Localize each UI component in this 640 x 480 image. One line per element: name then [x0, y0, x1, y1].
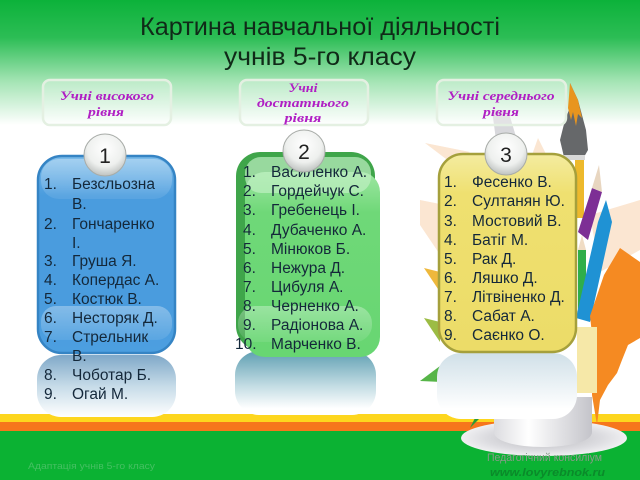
list: level 3 students — [444, 174, 565, 344]
list: level 2 students: 9. — [243, 317, 256, 334]
footer: left caption: Адаптація учнів 5-го класу — [28, 461, 155, 472]
list: level 2 students: Гордейчук С. — [271, 183, 364, 200]
label box: Учні достатнього рівня: достатнього — [257, 95, 350, 110]
icon: orange maple leaf — [590, 248, 640, 425]
title — [140, 13, 500, 71]
list: level 3 students: 8. — [444, 308, 457, 325]
list: level 2 students: 6. — [243, 260, 256, 277]
list: level 1 students: Чоботар Б. — [72, 367, 151, 384]
decoration: pale leaves behind the third panel — [420, 138, 640, 272]
list: level 1 students: Огай М. — [72, 386, 128, 403]
list: level 3 students: Батіг М. — [472, 232, 528, 249]
list: level 3 students: Літвіненко Д. — [472, 289, 565, 306]
footer: right credit — [487, 452, 605, 479]
badge: number 1: 1 — [99, 145, 111, 168]
decoration: ruler — [492, 110, 517, 140]
badge: number 3 — [485, 133, 527, 175]
list: level 2 students: Черненко А. — [271, 298, 359, 315]
list: level 3 students: 2. — [444, 193, 457, 210]
list: level 2 students: 5. — [243, 241, 256, 258]
list: level 3 students: Саєнко О. — [472, 327, 545, 344]
list: level 2 students: Цибуля А. — [271, 279, 343, 296]
list: level 3 students: 7. — [444, 289, 457, 306]
list: level 2 students: 4. — [243, 222, 256, 239]
list: level 3 students: Ляшко Д. — [472, 270, 538, 287]
list: level 1 students: В. — [72, 196, 87, 213]
list: level 1 students: 4. — [44, 272, 57, 289]
list: level 3 students: Султанян Ю. — [472, 193, 565, 210]
badge: number 3: 3 — [500, 144, 512, 167]
list: level 1 students: Копердас А. — [72, 272, 159, 289]
icon: white cup on a saucer — [461, 327, 627, 456]
list: level 1 students: Безсльозна — [72, 176, 155, 193]
label box: Учні достатнього рівня: Учні — [288, 80, 318, 95]
list: level 2 students: Мінюков Б. — [271, 241, 350, 258]
list: level 3 students: 1. — [444, 174, 457, 191]
list: level 1 students — [44, 176, 159, 403]
label box: Учні достатнього рівня — [240, 80, 368, 125]
badge: number 2 — [283, 130, 325, 172]
list: level 2 students: Дубаченко А. — [271, 222, 366, 239]
list: level 2 students: 8. — [243, 298, 256, 315]
footer: right credit: www.lovyrebnok.ru — [490, 467, 605, 479]
panel 2: green list — [235, 152, 380, 357]
list: level 2 students: Василенко А. — [271, 164, 367, 181]
list: level 1 students: Несторяк Д. — [72, 310, 158, 327]
list: level 3 students: 3. — [444, 213, 457, 230]
icon: purple pencil — [578, 165, 602, 240]
label box: Учні високого рівня — [43, 80, 171, 125]
list: level 2 students: 10. — [235, 336, 257, 353]
list: level 1 students: 3. — [44, 253, 57, 270]
list: level 2 students: Нежура Д. — [271, 260, 345, 277]
badge: number 1 — [84, 134, 126, 176]
list: level 2 students — [235, 164, 367, 353]
list: level 1 students: 8. — [44, 367, 57, 384]
label box: Учні середнього рівня — [437, 80, 566, 125]
list: level 3 students: 6. — [444, 270, 457, 287]
label box: Учні середнього рівня: рівня — [482, 104, 519, 119]
label box: Учні середнього рівня: Учні середнього — [448, 88, 555, 103]
background: bottom stripes and ground — [0, 414, 640, 480]
panel: reflection of panel 3 — [437, 353, 577, 419]
list: level 3 students: 5. — [444, 251, 457, 268]
list: level 1 students: В. — [72, 348, 87, 365]
list: level 1 students: 6. — [44, 310, 57, 327]
badge: number 2: 2 — [298, 141, 310, 164]
list: level 3 students: Мостовий В. — [472, 213, 562, 230]
panel 3: yellow list — [439, 154, 576, 352]
label box: Учні достатнього рівня: рівня — [283, 110, 322, 125]
list: level 2 students: Радіонова А. — [271, 317, 363, 334]
label box: Учні високого рівня: рівня — [87, 104, 124, 119]
list: level 3 students: 4. — [444, 232, 457, 249]
list: level 1 students: Костюк В. — [72, 291, 142, 308]
list: level 3 students: Фесенко В. — [472, 174, 552, 191]
list: level 1 students: 5. — [44, 291, 57, 308]
panel 1: blue list — [38, 156, 175, 403]
icon: green pencil — [578, 235, 586, 312]
list: level 1 students: 1. — [44, 176, 57, 193]
list: level 2 students: 1. — [243, 164, 256, 181]
list: level 3 students: 9. — [444, 327, 457, 344]
panel: reflection of panel 2 — [235, 351, 376, 415]
list: level 3 students: Рак Д. — [472, 251, 516, 268]
list: level 2 students: Марченко В. — [271, 336, 361, 353]
list: level 3 students: Сабат А. — [472, 308, 535, 325]
footer: right credit: Педагогічний консиліум — [487, 452, 602, 464]
list: level 1 students: 7. — [44, 329, 57, 346]
background: green gradient sky — [0, 0, 640, 125]
list: level 1 students: 9. — [44, 386, 57, 403]
list: level 2 students: 2. — [243, 183, 256, 200]
list: level 2 students: 7. — [243, 279, 256, 296]
list: level 2 students: Гребенець І. — [271, 202, 360, 219]
title: учнів 5-го класу — [224, 43, 417, 71]
list: level 1 students: Гончаренко — [72, 216, 155, 233]
label box: Учні високого рівня: Учні високого — [60, 88, 155, 103]
list: level 1 students: 2. — [44, 216, 57, 233]
icon: blue pen — [576, 200, 612, 322]
list: level 1 students: Груша Я. — [72, 253, 137, 270]
title: Картина навчальної діяльності — [140, 13, 500, 41]
icon: paint brush — [560, 83, 588, 218]
panel: reflection of panel 1 — [37, 355, 176, 417]
list: level 1 students: Стрельник — [72, 329, 148, 346]
list: level 1 students: І. — [72, 235, 81, 252]
list: level 2 students: 3. — [243, 202, 256, 219]
decoration: small leaves left of the third panel — [420, 268, 484, 428]
